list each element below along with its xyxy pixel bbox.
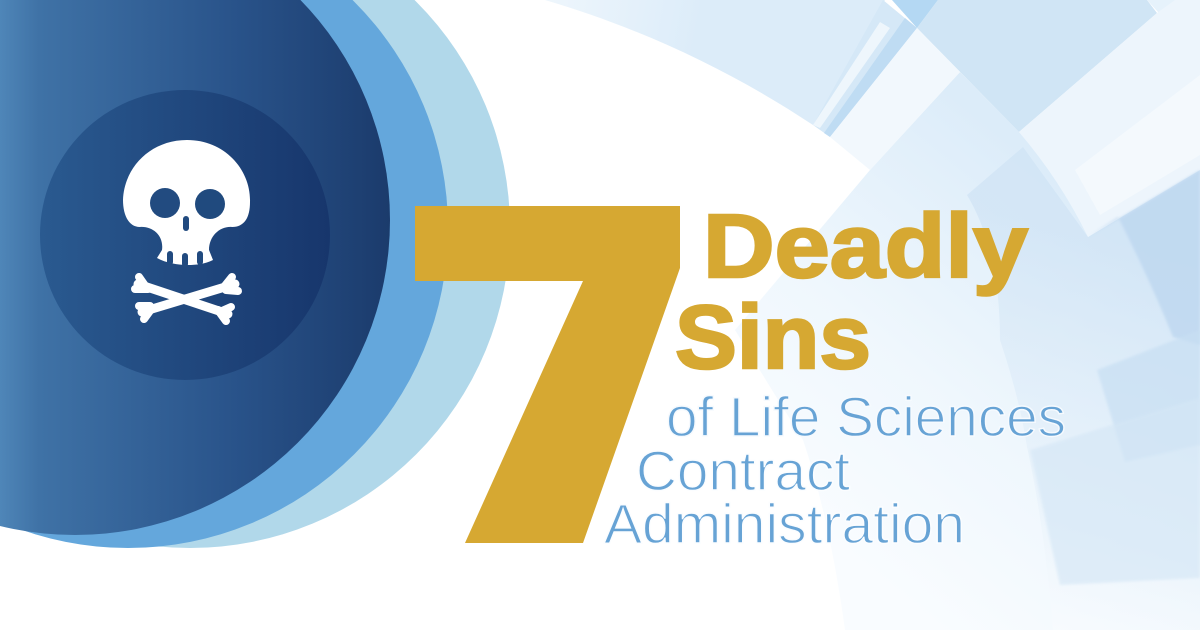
subtitle line 1: of Life Sciences	[666, 385, 1066, 448]
skull	[123, 140, 250, 267]
subtitle line 3: Administration	[604, 492, 965, 555]
numeral 7	[415, 206, 680, 543]
icon: skull and crossbones	[123, 140, 250, 321]
decorative circle: mid blue	[0, 0, 448, 548]
decorative circle: dark blue gradient	[0, 0, 390, 535]
decorative circle: light blue	[0, 0, 510, 548]
inner circle	[40, 90, 330, 380]
title: Deadly: Deadly	[703, 197, 1028, 297]
title: Sins: Sins	[675, 288, 871, 388]
background: glass panels	[545, 0, 1200, 630]
subtitle line 2: Contract	[636, 439, 850, 502]
crossbones	[135, 277, 238, 321]
